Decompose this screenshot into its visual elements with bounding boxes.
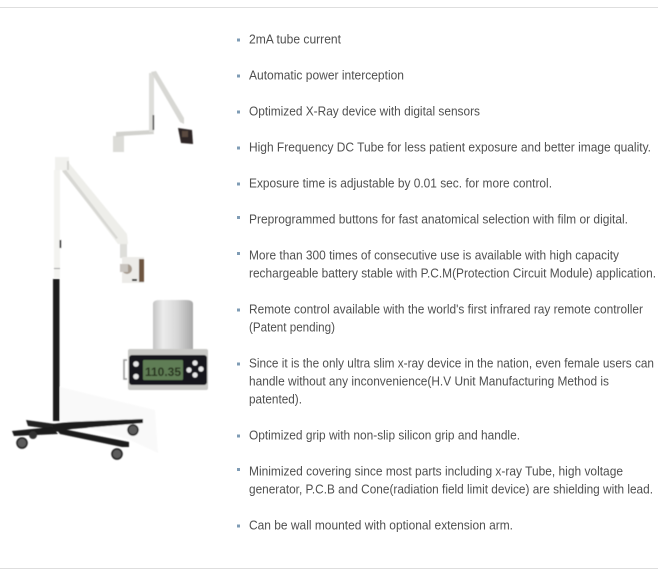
item: battery: More than 300 times of consecutive use is available with high capacity (249, 248, 620, 262)
item: tube current: 2mA tube current (249, 32, 341, 46)
feature list (237, 32, 656, 532)
item: ultra slim device: handle without any inconvenience(H.V Unit Manufacturing Method is (249, 374, 609, 388)
image: handheld control unit (124, 300, 208, 390)
lower horizontal arm (116, 130, 154, 137)
lcd screen (143, 360, 183, 380)
cone cylinder (153, 300, 193, 350)
side handle (124, 360, 127, 379)
upper diagonal arm (151, 71, 184, 124)
top joint (55, 157, 69, 170)
item: remote control (237, 302, 644, 334)
unit body (128, 349, 208, 390)
black pole (53, 279, 60, 421)
wall plate (113, 136, 124, 152)
item: ultra slim device: patented). (249, 392, 302, 406)
left buttons (133, 361, 139, 367)
black face panel (129, 355, 207, 385)
item: remote control: (Patent pending) (249, 320, 335, 334)
item: power interception: Automatic power interception (249, 68, 404, 82)
item: preprogrammed buttons: Preprogrammed buttons for fast anatomical selection with film or digital. (249, 212, 628, 226)
item: digital sensors: Optimized X-Ray device with digital sensors (249, 104, 480, 118)
tube head (120, 244, 127, 258)
casters (29, 431, 37, 439)
right buttons (192, 360, 198, 366)
item: minimized covering: Minimized covering since most parts including x-ray Tube, high voltage (249, 464, 623, 478)
white upper column (54, 170, 60, 278)
floor shadow (60, 387, 158, 453)
image: wall mounted x-ray arm (113, 71, 193, 152)
x-ray head (178, 128, 193, 144)
articulated arm (62, 162, 128, 244)
item: wall mounted: Can be wall mounted with optional extension arm. (249, 518, 513, 532)
item: ultra slim device (237, 356, 654, 406)
lcd readout: 110.35 (145, 365, 181, 379)
vertical arm (149, 73, 154, 132)
item: minimized covering (237, 464, 653, 496)
image: floor stand x-ray unit (12, 157, 158, 459)
item: exposure time: Exposure time is adjustable by 0.01 sec. for more control. (249, 176, 552, 190)
base legs (26, 420, 58, 430)
item: battery (237, 248, 656, 280)
item: optimized grip: Optimized grip with non-slip silicon grip and handle. (249, 428, 520, 442)
